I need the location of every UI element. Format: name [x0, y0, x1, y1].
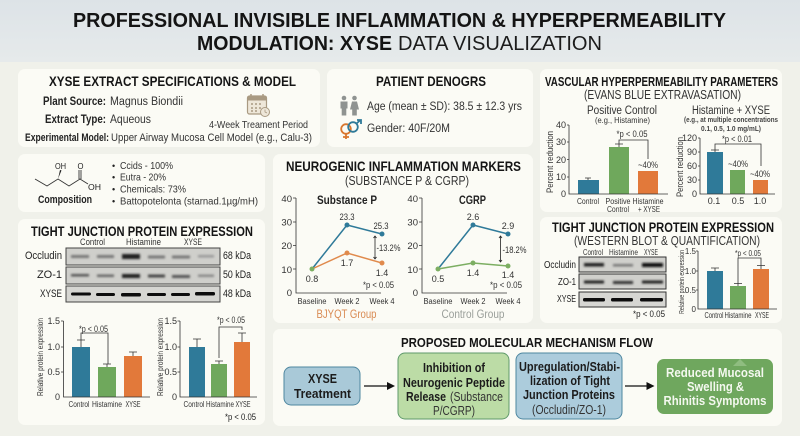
western blot: Histamine [609, 248, 638, 257]
western blot [544, 248, 666, 307]
bar chart: positive control: ~40% [638, 160, 658, 170]
line chart: CGRP: 20 [407, 241, 418, 252]
western blot: Control [583, 248, 603, 257]
line chart: substance P: 30 [281, 218, 292, 228]
western blot: Occludin [544, 259, 576, 271]
line chart: CGRP: 30 [407, 218, 418, 228]
line chart: substance P: -13.2% [376, 243, 400, 253]
line chart: CGRP: 10 [407, 265, 418, 276]
western blot: XYSE [40, 288, 62, 300]
composition list: Chemicals: 73% [120, 184, 186, 196]
western blot: ZO-1 [558, 276, 576, 288]
heading: vascular: (EVANS BLUE EXTRAVASATION) [584, 87, 741, 102]
line chart: substance P: *p < 0.05 [363, 280, 394, 290]
western blot: XYSE [644, 248, 658, 257]
arrow: upregulation to outcome [625, 382, 654, 390]
panel: composition [18, 154, 265, 212]
specification rows: Plant Source: [43, 96, 106, 108]
bar chart: histamine + XYSE: *p < 0.01 [722, 134, 752, 144]
heading: western blot [552, 220, 774, 248]
bar chart: positive control: Positive Control [587, 105, 657, 117]
icon: people [340, 96, 359, 116]
composition list: • [112, 196, 115, 206]
western blot: Control [80, 237, 105, 247]
line chart: CGRP [407, 193, 526, 321]
bar chart: occludin quantification: 1.5 [47, 316, 60, 326]
panel: molecular mechanism flow [273, 329, 782, 426]
bar chart: histamine + XYSE: Percent reduction [675, 137, 685, 197]
bar chart: ZO-1 quantification: *p < 0.05 [217, 315, 245, 325]
bar chart: positive control [545, 105, 668, 214]
bar chart: positive control: + XYSE [638, 205, 660, 214]
line chart: substance P: 0 [287, 288, 292, 299]
flow box: XYSE treatment: XYSE [308, 371, 337, 386]
panel: tight junction western blot [540, 217, 782, 323]
line chart: CGRP: 0 [413, 288, 418, 299]
flow box: upregulation: lization of Tight [530, 373, 611, 388]
bar chart: positive control: 20 [556, 155, 566, 165]
specification rows: Extract Type: [45, 114, 106, 126]
western blot: Histamine [126, 237, 161, 247]
heading: neurogenic [286, 158, 521, 188]
flow box: inhibition: Inhibition of [423, 360, 486, 375]
composition list: • [112, 184, 115, 194]
bar chart: quantification: Histamine [724, 311, 752, 320]
composition list [112, 160, 258, 208]
specification rows: Experimental Model: [25, 132, 109, 144]
line chart: substance P: Substance P [317, 193, 377, 207]
line chart: CGRP: 0.5 [432, 274, 444, 284]
flow box: outcome [657, 359, 773, 414]
line chart: substance P [281, 193, 400, 321]
western blot: XYSE [184, 237, 202, 247]
flow box: upregulation: (Occludin/ZO-1) [532, 403, 606, 417]
line chart: CGRP: Week 4 [496, 297, 521, 306]
specification rows [25, 96, 312, 144]
western blot [25, 237, 252, 302]
western blot: 68 kDa [223, 250, 252, 262]
title [73, 10, 727, 55]
heading: vascular [545, 74, 778, 102]
bar chart: histamine + XYSE: ~40% [728, 159, 748, 169]
flow box: XYSE treatment: Treatment [294, 386, 352, 401]
title: PROFESSIONAL INVISIBLE INFLAMMATION & HYPERPERMEABILITY [73, 10, 727, 32]
bar chart: histamine + XYSE: 60 [687, 161, 697, 171]
composition list: Battopotelonta (starnad.1µg/mH) [120, 196, 258, 208]
bar chart: ZO-1 quantification: Relative protein expression [155, 318, 165, 396]
line chart: substance P: 1.4 [376, 268, 388, 278]
panel: patient demographics [327, 69, 533, 147]
bar chart: occludin quantification: XYSE [126, 400, 140, 409]
bar chart: positive control: 40 [556, 120, 566, 130]
header band [0, 0, 800, 62]
line chart: substance P: 0.8 [306, 274, 318, 284]
icon: calendar [248, 94, 270, 116]
bar chart: histamine + XYSE: ~40% [750, 169, 770, 179]
flow box: outcome: Reduced Mucosal [666, 365, 764, 380]
bar chart: quantification: 0 [692, 305, 697, 314]
bar chart: occludin quantification: 0 [55, 392, 60, 402]
icon: molecule: OH [55, 161, 66, 171]
bar chart: quantification: *p < 0.05 [735, 249, 761, 258]
bar chart: quantification: 1.5 [685, 247, 697, 256]
bar chart: occludin quantification: Relative protein expression [35, 318, 45, 396]
line chart: substance P: 10 [281, 265, 292, 276]
bar chart: histamine + XYSE: 30 [687, 175, 697, 185]
western blot: ZO-1 [37, 269, 62, 281]
heading: neurogenic: NEUROGENIC INFLAMMATION MARKERS [286, 158, 521, 174]
bar chart: quantification: Relative protein expression [679, 250, 686, 314]
flow box: upregulation: Junction Proteins [523, 387, 615, 402]
bar chart: quantification [679, 247, 777, 320]
line chart: CGRP: Baseline [424, 297, 453, 306]
gender text: Gender: 40F/20M [367, 123, 450, 135]
bar chart: quantification: Control [704, 311, 724, 320]
significance note: *p < 0.05 [633, 309, 665, 320]
bar chart: quantification: 0.5 [685, 286, 697, 295]
bar chart: ZO-1 quantification: 1.5 [164, 316, 177, 326]
bar chart: ZO-1 quantification: Histamine [206, 400, 234, 409]
icon: molecule: OH [88, 182, 101, 192]
arrow: treatment to inhibition [364, 382, 395, 390]
line chart: CGRP: Control Group [442, 307, 505, 321]
bar chart: histamine + XYSE [675, 105, 778, 206]
western blot: 48 kDa [223, 288, 252, 300]
bar chart: occludin quantification: Histamine [92, 400, 122, 409]
icon: molecule [35, 161, 101, 192]
flow box: upregulation: Upregulation/Stabi- [519, 359, 620, 374]
bar chart: positive control: Percent reduction [545, 131, 555, 193]
age text: Age (mean ± SD): 38.5 ± 12.3 yrs [367, 101, 522, 113]
line chart: CGRP: 2.9 [502, 221, 514, 231]
bar chart: occludin quantification [35, 316, 150, 409]
bar chart: positive control: Control [607, 205, 629, 214]
flow box: upregulation [516, 353, 622, 419]
line chart: CGRP: *p < 0.05 [490, 280, 522, 290]
flow box: inhibition: P/CGRP) [433, 404, 475, 418]
bar chart: positive control: 0 [561, 189, 566, 199]
flow box: inhibition: Release [406, 389, 446, 404]
bar chart: occludin quantification: *p < 0.05 [79, 324, 108, 334]
specification rows: Magnus Biondii [110, 96, 183, 108]
bar chart: histamine + XYSE: (e.g., at multiple concentrations [684, 117, 778, 124]
bar chart: ZO-1 quantification: 0 [172, 392, 177, 402]
panel: extract specifications [18, 69, 320, 147]
bar chart: quantification: 1.0 [685, 267, 697, 276]
bar chart: histamine + XYSE: 0.1, 0.5, 1.0 mg/mL) [701, 126, 761, 133]
bar chart: occludin quantification: 1.0 [47, 342, 60, 352]
western blot: Occludin [25, 250, 62, 262]
heading: tight junction: TIGHT JUNCTION PROTEIN EXPRESSION [31, 223, 253, 239]
western blot: 50 kDa [223, 269, 252, 281]
title: DATA VISUALIZATION [398, 33, 602, 55]
line chart: CGRP: 1.4 [502, 270, 514, 280]
bar chart: positive control: Histamine [632, 197, 664, 206]
bar chart: positive control: 30 [556, 137, 566, 147]
bar chart: positive control: 10 [556, 172, 566, 182]
line chart: CGRP: Week 2 [460, 297, 486, 306]
bar chart: positive control: *p < 0.05 [616, 129, 648, 139]
bar chart: occludin quantification: Control [68, 400, 90, 409]
line chart: substance P: Baseline [298, 297, 327, 306]
composition list: Eutra - 20% [120, 172, 166, 184]
flow box: inhibition: Neurogenic Peptide [403, 375, 505, 390]
icon: molecule: O [78, 161, 84, 171]
line chart: CGRP: CGRP [459, 193, 486, 207]
line chart: CGRP: 40 [407, 194, 418, 205]
bar chart: histamine + XYSE: 0.5 [732, 196, 744, 206]
western blot: XYSE [557, 293, 576, 305]
panel: neurogenic inflammation markers [273, 154, 533, 323]
bar chart: occludin quantification: 0.5 [47, 367, 60, 377]
line chart: substance P: 25.3 [374, 221, 388, 231]
heading: patient: PATIENT DENOGRS [376, 73, 486, 89]
bar chart: ZO-1 quantification: XYSE [236, 400, 250, 409]
specification rows: Aqueous [110, 114, 151, 126]
bar chart: ZO-1 quantification: 1.0 [164, 342, 177, 352]
bar chart: positive control: (e.g., Histamine) [595, 115, 650, 125]
composition list: • [112, 172, 115, 182]
icon: gender [341, 120, 361, 139]
line chart: CGRP: -18.2% [502, 245, 526, 255]
heading: mechanism: PROPOSED MOLECULAR MECHANISM FLOW [401, 335, 654, 350]
flow box: outcome: Rhinitis Symptoms [664, 393, 766, 408]
composition label: Composition [38, 194, 92, 206]
bar chart: histamine + XYSE: 1.0 [754, 196, 766, 206]
bar chart: histamine + XYSE: 0.1 [708, 196, 720, 206]
composition list: • [112, 161, 115, 171]
bar chart: histamine + XYSE: 120 [682, 133, 697, 143]
title: MODULATION: XYSE [197, 33, 392, 55]
specification rows: Upper Airway Mucosa Cell Model (e.g., Calu-3) [111, 132, 312, 144]
flow box: inhibition: (Substance [450, 390, 503, 404]
bar chart: positive control: Positive [606, 197, 631, 206]
flow box: outcome: Swelling & [687, 379, 744, 394]
significance note: *p < 0.05 [225, 412, 256, 423]
bar chart: positive control: Control [577, 197, 599, 206]
flow box: inhibition [398, 353, 509, 419]
line chart: substance P: 20 [281, 241, 292, 252]
line chart: substance P: Week 2 [334, 297, 360, 306]
bar chart: ZO-1 quantification: Control [184, 400, 205, 409]
flow box: XYSE treatment [284, 367, 360, 405]
heading: neurogenic: (SUBSTANCE P & CGRP) [345, 173, 469, 188]
bar chart: quantification: XYSE [755, 311, 769, 320]
line chart: substance P: BJYQT Group [316, 307, 377, 321]
line chart: substance P: 1.7 [341, 258, 353, 268]
line chart: CGRP: 2.6 [467, 212, 479, 222]
line chart: substance P: Week 4 [370, 297, 395, 306]
panel: vascular hyperpermeability [540, 69, 782, 214]
line chart: substance P: 40 [281, 194, 292, 205]
bar chart: ZO-1 quantification [155, 315, 257, 409]
bar chart: histamine + XYSE: Histamine + XYSE [692, 105, 770, 117]
heading: specifications: XYSE EXTRACT SPECIFICATIONS & MODEL [49, 73, 296, 89]
bar chart: histamine + XYSE: 90 [687, 147, 697, 157]
bar chart: histamine + XYSE: 0 [692, 189, 697, 199]
line chart: CGRP: 1.4 [467, 268, 479, 278]
panel: tight junction left [18, 219, 265, 425]
line chart: substance P: 23.3 [340, 212, 354, 222]
bar chart: ZO-1 quantification: 0.5 [164, 367, 177, 377]
treatment period label: 4-Week Treament Period [209, 119, 308, 131]
composition list: Ccids - 100% [120, 160, 173, 172]
